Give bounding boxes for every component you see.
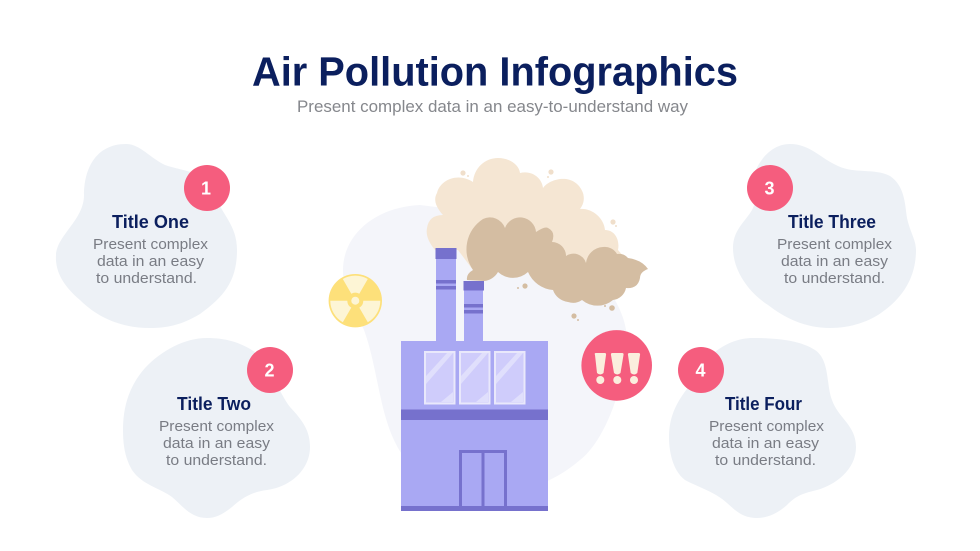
body one: data in an easy bbox=[97, 253, 205, 270]
body one: to understand. bbox=[96, 270, 197, 287]
blob two bbox=[123, 338, 310, 518]
icon: alert exclamation marks bbox=[581, 330, 652, 401]
icon: radiation bbox=[329, 274, 382, 327]
central backdrop blob bbox=[343, 205, 627, 492]
panel: title four bbox=[669, 338, 856, 518]
badge 1: 1 bbox=[201, 178, 211, 198]
title: Air Pollution Infographics bbox=[252, 48, 738, 94]
panel: title two bbox=[123, 338, 310, 518]
floor band bbox=[401, 506, 548, 511]
smoke particles: light bbox=[460, 169, 617, 227]
badge 4: 4 bbox=[695, 360, 706, 380]
body three: Present complex bbox=[777, 236, 893, 253]
smoke particles: dark bbox=[517, 283, 615, 321]
body four: to understand. bbox=[715, 452, 816, 469]
chimney one bbox=[436, 248, 456, 345]
body one: Present complex bbox=[93, 236, 209, 253]
heading three: Title Three bbox=[788, 212, 876, 232]
body two bbox=[159, 418, 275, 469]
heading one: Title One bbox=[112, 212, 189, 232]
door bbox=[460, 452, 506, 506]
smoke cloud: light bbox=[427, 158, 625, 272]
body two: to understand. bbox=[166, 452, 267, 469]
factory bbox=[401, 248, 548, 511]
body three bbox=[777, 236, 893, 287]
blob three bbox=[733, 144, 916, 328]
badge 1 bbox=[184, 165, 230, 211]
blob four bbox=[669, 338, 856, 518]
badge 2: 2 bbox=[264, 360, 275, 380]
body four bbox=[709, 418, 825, 469]
badge 3 bbox=[747, 165, 793, 211]
panel: title three bbox=[733, 144, 916, 328]
badge 3: 3 bbox=[764, 178, 775, 198]
body one bbox=[93, 236, 209, 287]
subtitle: Present complex data in an easy-to-understand way bbox=[297, 98, 689, 116]
badge 2 bbox=[247, 347, 293, 393]
chimney two bbox=[464, 281, 484, 345]
heading four: Title Four bbox=[725, 394, 802, 414]
building body bbox=[401, 341, 548, 511]
body two: data in an easy bbox=[163, 435, 271, 452]
body three: to understand. bbox=[784, 270, 885, 287]
body four: data in an easy bbox=[712, 435, 820, 452]
badge 4 bbox=[678, 347, 724, 393]
body two: Present complex bbox=[159, 418, 275, 435]
body three: data in an easy bbox=[781, 253, 889, 270]
heading two: Title Two bbox=[177, 394, 251, 414]
smoke cloud: dark bbox=[466, 217, 648, 306]
windows bbox=[425, 352, 524, 404]
panel: title one bbox=[56, 144, 237, 328]
blob one bbox=[56, 144, 237, 328]
body four: Present complex bbox=[709, 418, 825, 435]
roof band bbox=[401, 410, 548, 420]
